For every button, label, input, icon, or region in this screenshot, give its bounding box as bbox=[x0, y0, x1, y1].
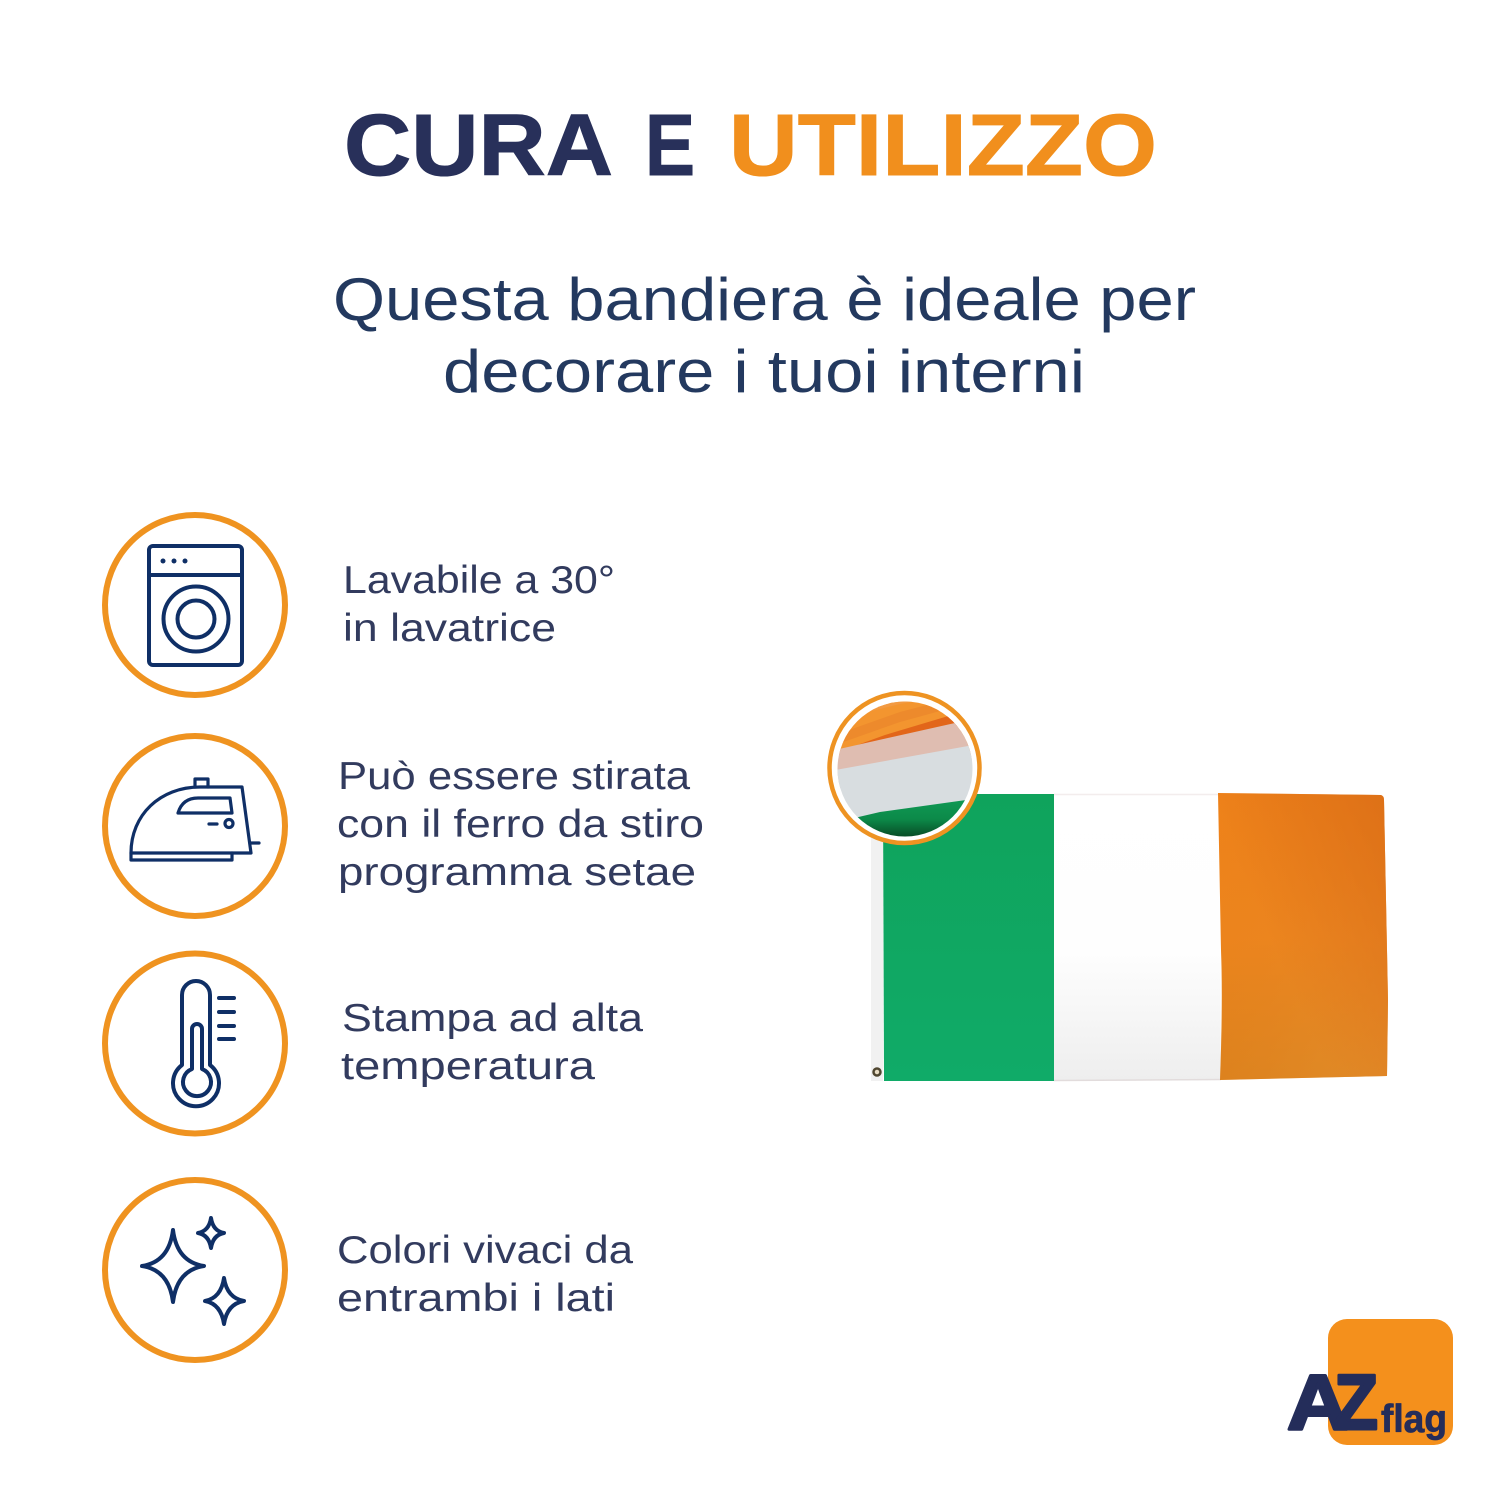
flag of Ireland bbox=[871, 793, 1388, 1081]
feature: colours bbox=[105, 1180, 634, 1360]
logo: AZ flag: flag bbox=[1381, 1398, 1447, 1441]
text: ironing: con il ferro da stiro bbox=[337, 803, 704, 846]
text: washable: in lavatrice bbox=[343, 607, 556, 650]
title: UTILIZZO bbox=[729, 97, 1157, 194]
icon: iron bbox=[105, 736, 285, 916]
infographic canvas bbox=[102, 114, 1453, 1445]
text: ironing bbox=[337, 755, 704, 894]
icon: sparkles bbox=[105, 1180, 285, 1360]
icon: thermometer bbox=[105, 954, 285, 1134]
grommet bbox=[874, 1068, 880, 1076]
text: colours: Colori vivaci da bbox=[337, 1229, 634, 1272]
text: washable bbox=[343, 559, 615, 650]
logo: AZ flag bbox=[1287, 1319, 1453, 1446]
feature: iron bbox=[105, 736, 704, 916]
subtitle: decorare i tuoi interni bbox=[443, 338, 1085, 405]
text: print: Stampa ad alta bbox=[342, 997, 644, 1040]
logo: AZ flag: A bbox=[1287, 1358, 1349, 1446]
subtitle bbox=[333, 266, 1196, 405]
feature: washing machine bbox=[105, 515, 615, 695]
text: colours: entrambi i lati bbox=[337, 1277, 615, 1320]
text: ironing: programma setae bbox=[338, 851, 696, 894]
text: colours bbox=[337, 1229, 634, 1320]
text: print: temperatura bbox=[341, 1045, 596, 1088]
text: ironing: Può essere stirata bbox=[338, 755, 691, 798]
icon: washing machine bbox=[105, 515, 285, 695]
title bbox=[344, 97, 1157, 194]
logo: AZ flag: Z bbox=[1334, 1358, 1378, 1446]
text: washable: Lavabile a 30° bbox=[343, 559, 615, 602]
title: CURA bbox=[344, 97, 613, 194]
text: print bbox=[341, 997, 644, 1088]
detail inset bbox=[830, 693, 980, 843]
feature: temperature bbox=[105, 954, 644, 1134]
title: E bbox=[645, 97, 695, 194]
subtitle: Questa bandiera è ideale per bbox=[333, 266, 1196, 333]
